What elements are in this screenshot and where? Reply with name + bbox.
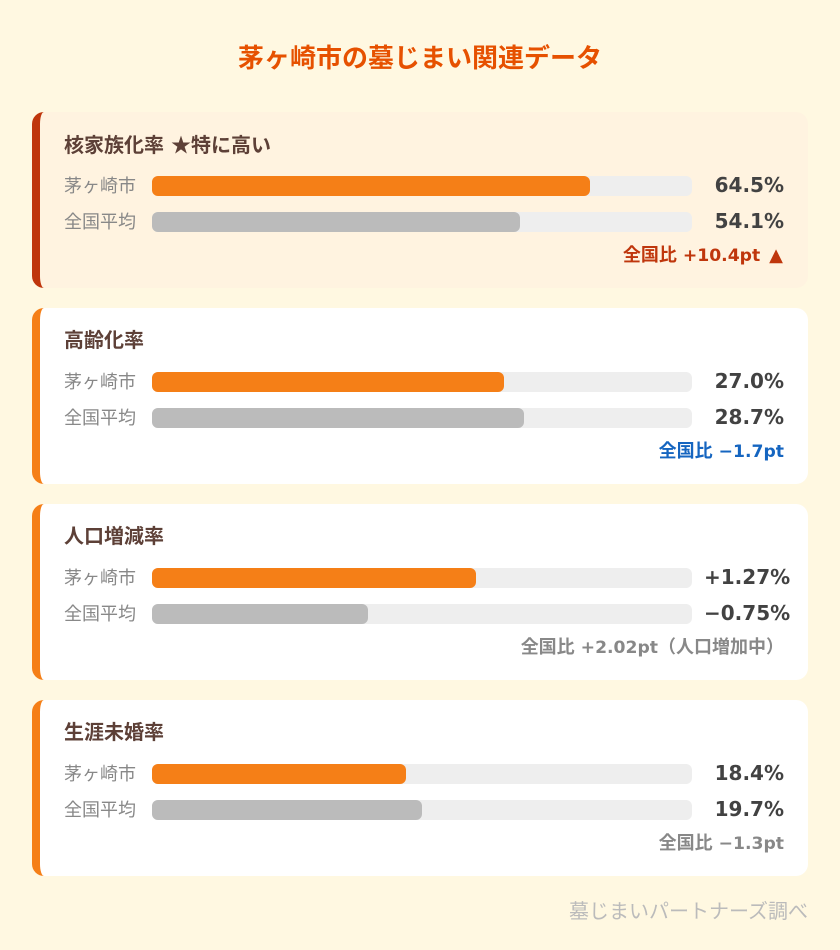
bar	[152, 800, 692, 820]
comparison note: 全国比 +10.4pt ▲	[623, 245, 783, 266]
row: Chigasaki	[64, 173, 784, 197]
row: national average	[64, 797, 784, 821]
heading: 核家族化率 ★特に高い	[64, 129, 271, 158]
row: Chigasaki	[64, 761, 784, 785]
bar	[152, 372, 692, 392]
heading: 人口増減率	[64, 524, 164, 548]
value: 28.7%	[715, 405, 784, 429]
label: 全国平均	[64, 212, 136, 233]
bar	[152, 408, 692, 428]
row: national average	[64, 209, 784, 233]
bar	[152, 568, 692, 588]
bar	[152, 604, 692, 624]
panel: nuclear family rate	[32, 112, 808, 288]
label: 全国平均	[64, 800, 136, 821]
label: 茅ヶ崎市	[64, 568, 136, 589]
row: national average	[64, 601, 790, 625]
bar	[152, 764, 692, 784]
value: −0.75%	[704, 601, 790, 625]
label: 全国平均	[64, 604, 136, 625]
source note: 墓じまいパートナーズ調べ	[569, 899, 808, 923]
panel: population change rate	[32, 504, 808, 680]
bar	[152, 176, 692, 196]
value: 64.5%	[715, 173, 784, 197]
comparison note: 全国比 −1.3pt	[659, 833, 784, 854]
heading: 高齢化率	[64, 328, 144, 352]
row: Chigasaki	[64, 369, 784, 393]
value: 54.1%	[715, 209, 784, 233]
heading: 生涯未婚率	[64, 720, 164, 744]
panel: aging rate	[32, 308, 808, 484]
row: national average	[64, 405, 784, 429]
comparison note: 全国比 +2.02pt（人口増加中）	[521, 637, 784, 658]
value: 19.7%	[715, 797, 784, 821]
value: 18.4%	[715, 761, 784, 785]
title: 茅ヶ崎市の墓じまい関連データ	[238, 44, 602, 74]
label: 茅ヶ崎市	[64, 176, 136, 197]
value: 27.0%	[715, 369, 784, 393]
comparison note: 全国比 −1.7pt	[659, 441, 784, 462]
label: 全国平均	[64, 408, 136, 429]
row: Chigasaki	[64, 565, 790, 589]
bar	[152, 212, 692, 232]
panel: lifetime unmarried rate	[32, 700, 808, 876]
label: 茅ヶ崎市	[64, 372, 136, 393]
label: 茅ヶ崎市	[64, 764, 136, 785]
value: +1.27%	[704, 565, 790, 589]
